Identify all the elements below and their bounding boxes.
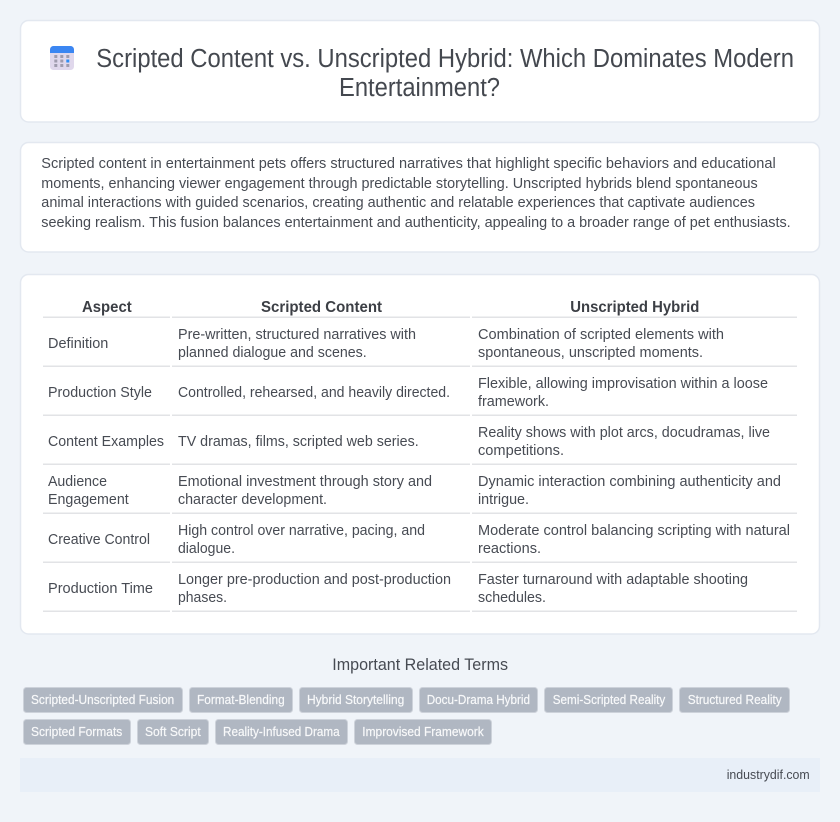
tag: Format-Blending [197,692,285,707]
table row: content examples: TV dramas, films, scripted web series. [178,434,419,450]
table row: production style: framework. [478,394,549,410]
table row: creative control: dialogue. [178,541,235,557]
tag: Scripted-Unscripted Fusion [31,692,174,707]
tag: Structured Reality [688,692,782,707]
panel: introduction [20,142,820,252]
table row: content examples: competitions. [478,443,564,459]
tag [300,688,412,712]
tag: Soft Script [145,724,201,739]
table row: production time: Faster turnaround with adaptable shooting [478,572,748,588]
table row: creative control: reactions. [478,541,541,557]
tag: Hybrid Storytelling [307,692,404,707]
panel: comparison table [20,274,820,634]
table row: content examples [48,425,770,459]
title: Entertainment? [339,74,500,102]
table row: content examples: Reality shows with plot arcs, docudramas, live [478,425,770,441]
tag [190,688,292,712]
table row: production time: schedules. [478,590,546,606]
table row: audience engagement: Audience [48,474,107,490]
table row: definition: Definition [48,336,108,352]
panel: header [20,20,820,122]
table row: production style: Production Style [48,385,152,401]
text block: introduction paragraph: animal interactions with guided scenarios, creating authentic and relatable experiences that captivate audiences [41,195,755,211]
table row: creative control: Creative Control [48,532,150,548]
table row: production style [48,376,768,410]
tag [138,720,208,744]
tag: Reality-Infused Drama [223,724,340,739]
footer: industrydif.com [727,767,810,782]
table row: production time: Longer pre-production and post-production [178,572,451,588]
tag [24,720,130,744]
tag [24,688,182,712]
table header row: Unscripted Hybrid [570,299,699,316]
table row: production time: Production Time [48,581,153,597]
table header row: Aspect [82,299,132,316]
table header row: Scripted Content [261,299,382,316]
tag [354,720,492,744]
tag: Semi-Scripted Reality [553,692,666,707]
table row: definition [48,327,724,361]
heading: important related terms: Important Related Terms [332,656,508,674]
title: Scripted Content vs. Unscripted Hybrid: Which Dominates Modern [96,45,794,73]
table row: audience engagement [48,474,781,508]
table row: definition: planned dialogue and scenes. [178,345,367,361]
table row: production style: Flexible, allowing improvisation within a loose [478,376,768,392]
tag: Improvised Framework [362,724,484,739]
tag [544,688,672,712]
title [96,45,794,102]
table row: production time [48,572,748,606]
text block: introduction paragraph [41,156,791,231]
tag list: related terms [24,688,790,744]
tag [216,720,348,744]
table row: creative control: High control over narrative, pacing, and [178,523,425,539]
table row: audience engagement: Emotional investment through story and [178,474,432,490]
table row: definition: Pre-written, structured narratives with [178,327,416,343]
footer [20,758,820,792]
table row: definition: Combination of scripted elements with [478,327,724,343]
table row: audience engagement: Engagement [48,492,129,508]
table row: creative control: Moderate control balancing scripting with natural [478,523,790,539]
tag: Scripted Formats [31,724,123,739]
icon: calendar [50,46,74,70]
table row: content examples: Content Examples [48,434,164,450]
table row: production style: Controlled, rehearsed, and heavily directed. [178,385,450,401]
text block: introduction paragraph: seeking realism. This fusion balances entertainment and authenticity, appealing to a broader range of pet enthusiasts. [41,215,791,231]
table row: definition: spontaneous, unscripted moments. [478,345,703,361]
table header row [82,299,699,316]
tag [420,688,538,712]
text block: introduction paragraph: moments, enhancing viewer engagement through predictable storytelling. Unscripted hybrids blend spontaneous [41,176,758,192]
tag: Docu-Drama Hybrid [427,692,530,707]
tag [680,688,790,712]
table row: creative control [48,523,790,557]
table row: audience engagement: Dynamic interaction combining authenticity and [478,474,781,490]
text block: introduction paragraph: Scripted content in entertainment pets offers structured narratives that highlight specific behaviors and educational [41,156,776,172]
table row: audience engagement: character development. [178,492,327,508]
table row: production time: phases. [178,590,227,606]
table row: audience engagement: intrigue. [478,492,529,508]
